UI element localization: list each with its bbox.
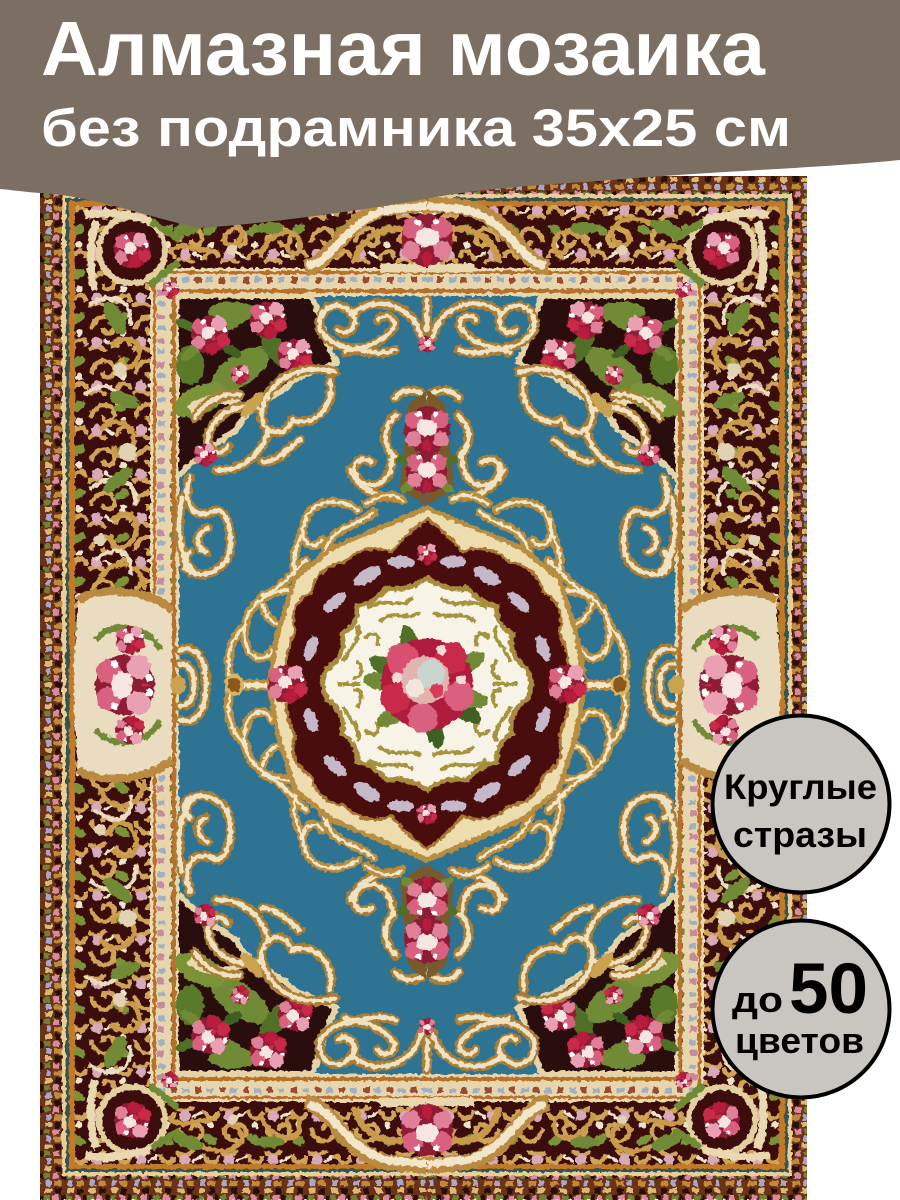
carpet artwork <box>30 170 824 1200</box>
badge: round rhinestones: Круглые <box>724 768 877 807</box>
central medallion <box>268 508 587 860</box>
medallion inner scrolls <box>337 598 517 770</box>
central peony <box>363 625 488 749</box>
badge: round rhinestones: стразы <box>733 814 867 855</box>
title: Алмазная мозаика <box>41 6 766 92</box>
medallion inner panel <box>323 578 531 790</box>
header banner <box>0 0 900 228</box>
subtitle: без подрамника 35х25 см <box>41 99 791 158</box>
badge: up to 50 colours: 50 <box>789 950 868 1029</box>
badge: up to 50 colours <box>712 920 890 1098</box>
medallion flower ring <box>301 556 553 812</box>
badge: up to 50 colours: цветов <box>735 1020 864 1061</box>
badge: round rhinestones <box>712 716 890 892</box>
badge: up to 50 colours: до <box>732 979 783 1020</box>
